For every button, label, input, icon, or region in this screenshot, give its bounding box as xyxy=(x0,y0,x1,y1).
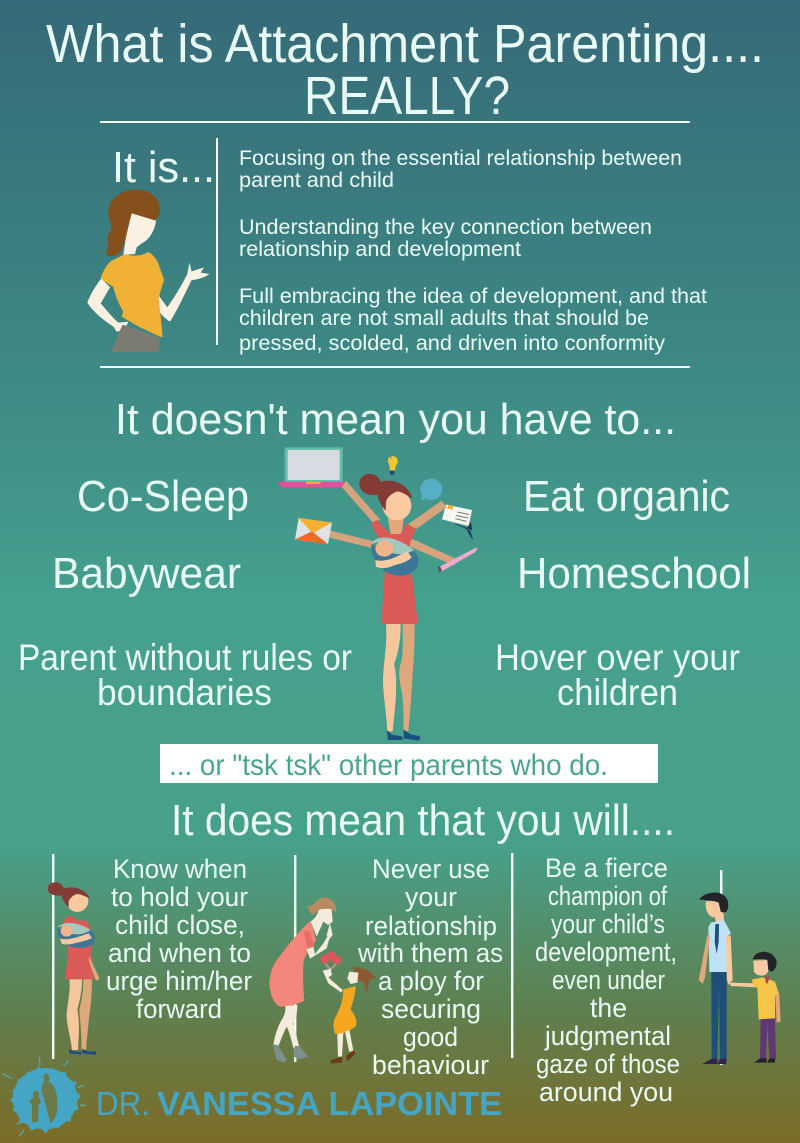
text block: column two xyxy=(357,854,503,1080)
text block: column three: around you xyxy=(539,1077,673,1107)
text block: column three: development, xyxy=(535,937,677,967)
text block: column three: even under xyxy=(552,965,665,995)
list: right column: Homeschool xyxy=(517,549,751,598)
baby in sling xyxy=(371,543,419,576)
text block: column two: behaviour xyxy=(372,1050,489,1080)
icon: mother holding baby xyxy=(48,882,99,1055)
list: what it is: Full embracing the idea of development, and that xyxy=(239,285,707,308)
text block: column three: your child’s xyxy=(551,909,665,939)
text block: column two: a ploy for xyxy=(378,966,484,996)
heading: it is: It is... xyxy=(112,143,215,192)
list: left column: Parent without rules or xyxy=(18,637,352,678)
wordmark: DR. xyxy=(96,1085,150,1122)
legs xyxy=(383,624,401,731)
icon: splatter with parent and child silhouette xyxy=(3,1057,85,1136)
list: what it is: Focusing on the essential relationship between xyxy=(239,147,682,170)
list: left column: Babywear xyxy=(52,549,241,598)
text block: column two: your xyxy=(405,882,457,912)
list: right column: Hover over your xyxy=(495,637,740,678)
icon: multitasking mother xyxy=(277,447,478,741)
text block: column three: judgmental xyxy=(544,1021,671,1051)
list: left column: Co-Sleep xyxy=(77,472,249,521)
father xyxy=(699,893,733,1064)
list: right column xyxy=(495,472,751,713)
text block: column three: champion of xyxy=(548,881,667,911)
hair xyxy=(359,474,413,511)
text block: column three xyxy=(535,853,680,1107)
title: REALLY? xyxy=(304,66,510,126)
shoes xyxy=(387,730,403,740)
dress xyxy=(371,520,418,624)
callout: white box: ... or "tsk tsk" other parents who do. xyxy=(169,749,608,782)
text block: column two: securing xyxy=(381,994,481,1024)
text block: column two: with them as xyxy=(357,938,503,968)
wordmark: VANESSA LAPOINTE xyxy=(157,1085,502,1122)
list: what it is: children are not small adults that should be xyxy=(239,307,649,330)
list: right column: Eat organic xyxy=(523,472,730,521)
icon: light bulb xyxy=(385,456,398,475)
text block: column two: relationship xyxy=(365,911,497,941)
list: what it is xyxy=(239,147,707,355)
list: what it is: Understanding the key connection between xyxy=(239,216,652,239)
icon: envelope xyxy=(295,518,332,544)
list: left column: boundaries xyxy=(97,672,272,713)
head xyxy=(383,491,411,520)
neck xyxy=(387,515,404,535)
heading: it does mean: It does mean that you will.... xyxy=(171,796,675,845)
text block: column three: Be a fierce xyxy=(545,853,668,883)
list: what it is: pressed, scolded, and driven into conformity xyxy=(239,332,666,355)
divider lines xyxy=(52,853,722,1065)
son xyxy=(730,952,781,1063)
icon: book xyxy=(442,505,473,539)
text block: column three: the xyxy=(590,993,627,1023)
list: what it is: relationship and development xyxy=(239,238,521,261)
icon: laptop xyxy=(277,447,345,488)
title: What is Attachment Parenting.... xyxy=(46,14,764,74)
list: what it is: parent and child xyxy=(239,169,394,192)
icon: pink pencil xyxy=(438,548,478,572)
text block: column one: urge him/her xyxy=(106,966,252,996)
text block: column one: Know when xyxy=(113,854,247,884)
text block: column one: and when to xyxy=(108,938,251,968)
text block: column two: good xyxy=(403,1022,458,1052)
title xyxy=(46,14,764,126)
list: right column: children xyxy=(557,672,678,713)
list: left column xyxy=(18,472,352,713)
text block: column three: gaze of those xyxy=(536,1049,680,1079)
icon: woman in yellow shirt xyxy=(87,190,209,352)
logo: Dr. Vanessa Lapointe xyxy=(3,1057,502,1136)
icon: father and son xyxy=(699,893,781,1064)
icon: mother and daughter with flowers xyxy=(269,897,376,1063)
text block: column two: Never use xyxy=(372,854,490,884)
text block: column one: child close, xyxy=(115,910,245,940)
text block: column one: forward xyxy=(136,994,222,1024)
text block: column one xyxy=(106,854,252,1024)
icon: speech bubble xyxy=(420,479,442,501)
heading: it doesn't mean: It doesn't mean you have to... xyxy=(115,395,676,444)
arms xyxy=(328,481,457,565)
text block: column one: to hold your xyxy=(111,882,248,912)
panel: it is xyxy=(87,138,707,355)
